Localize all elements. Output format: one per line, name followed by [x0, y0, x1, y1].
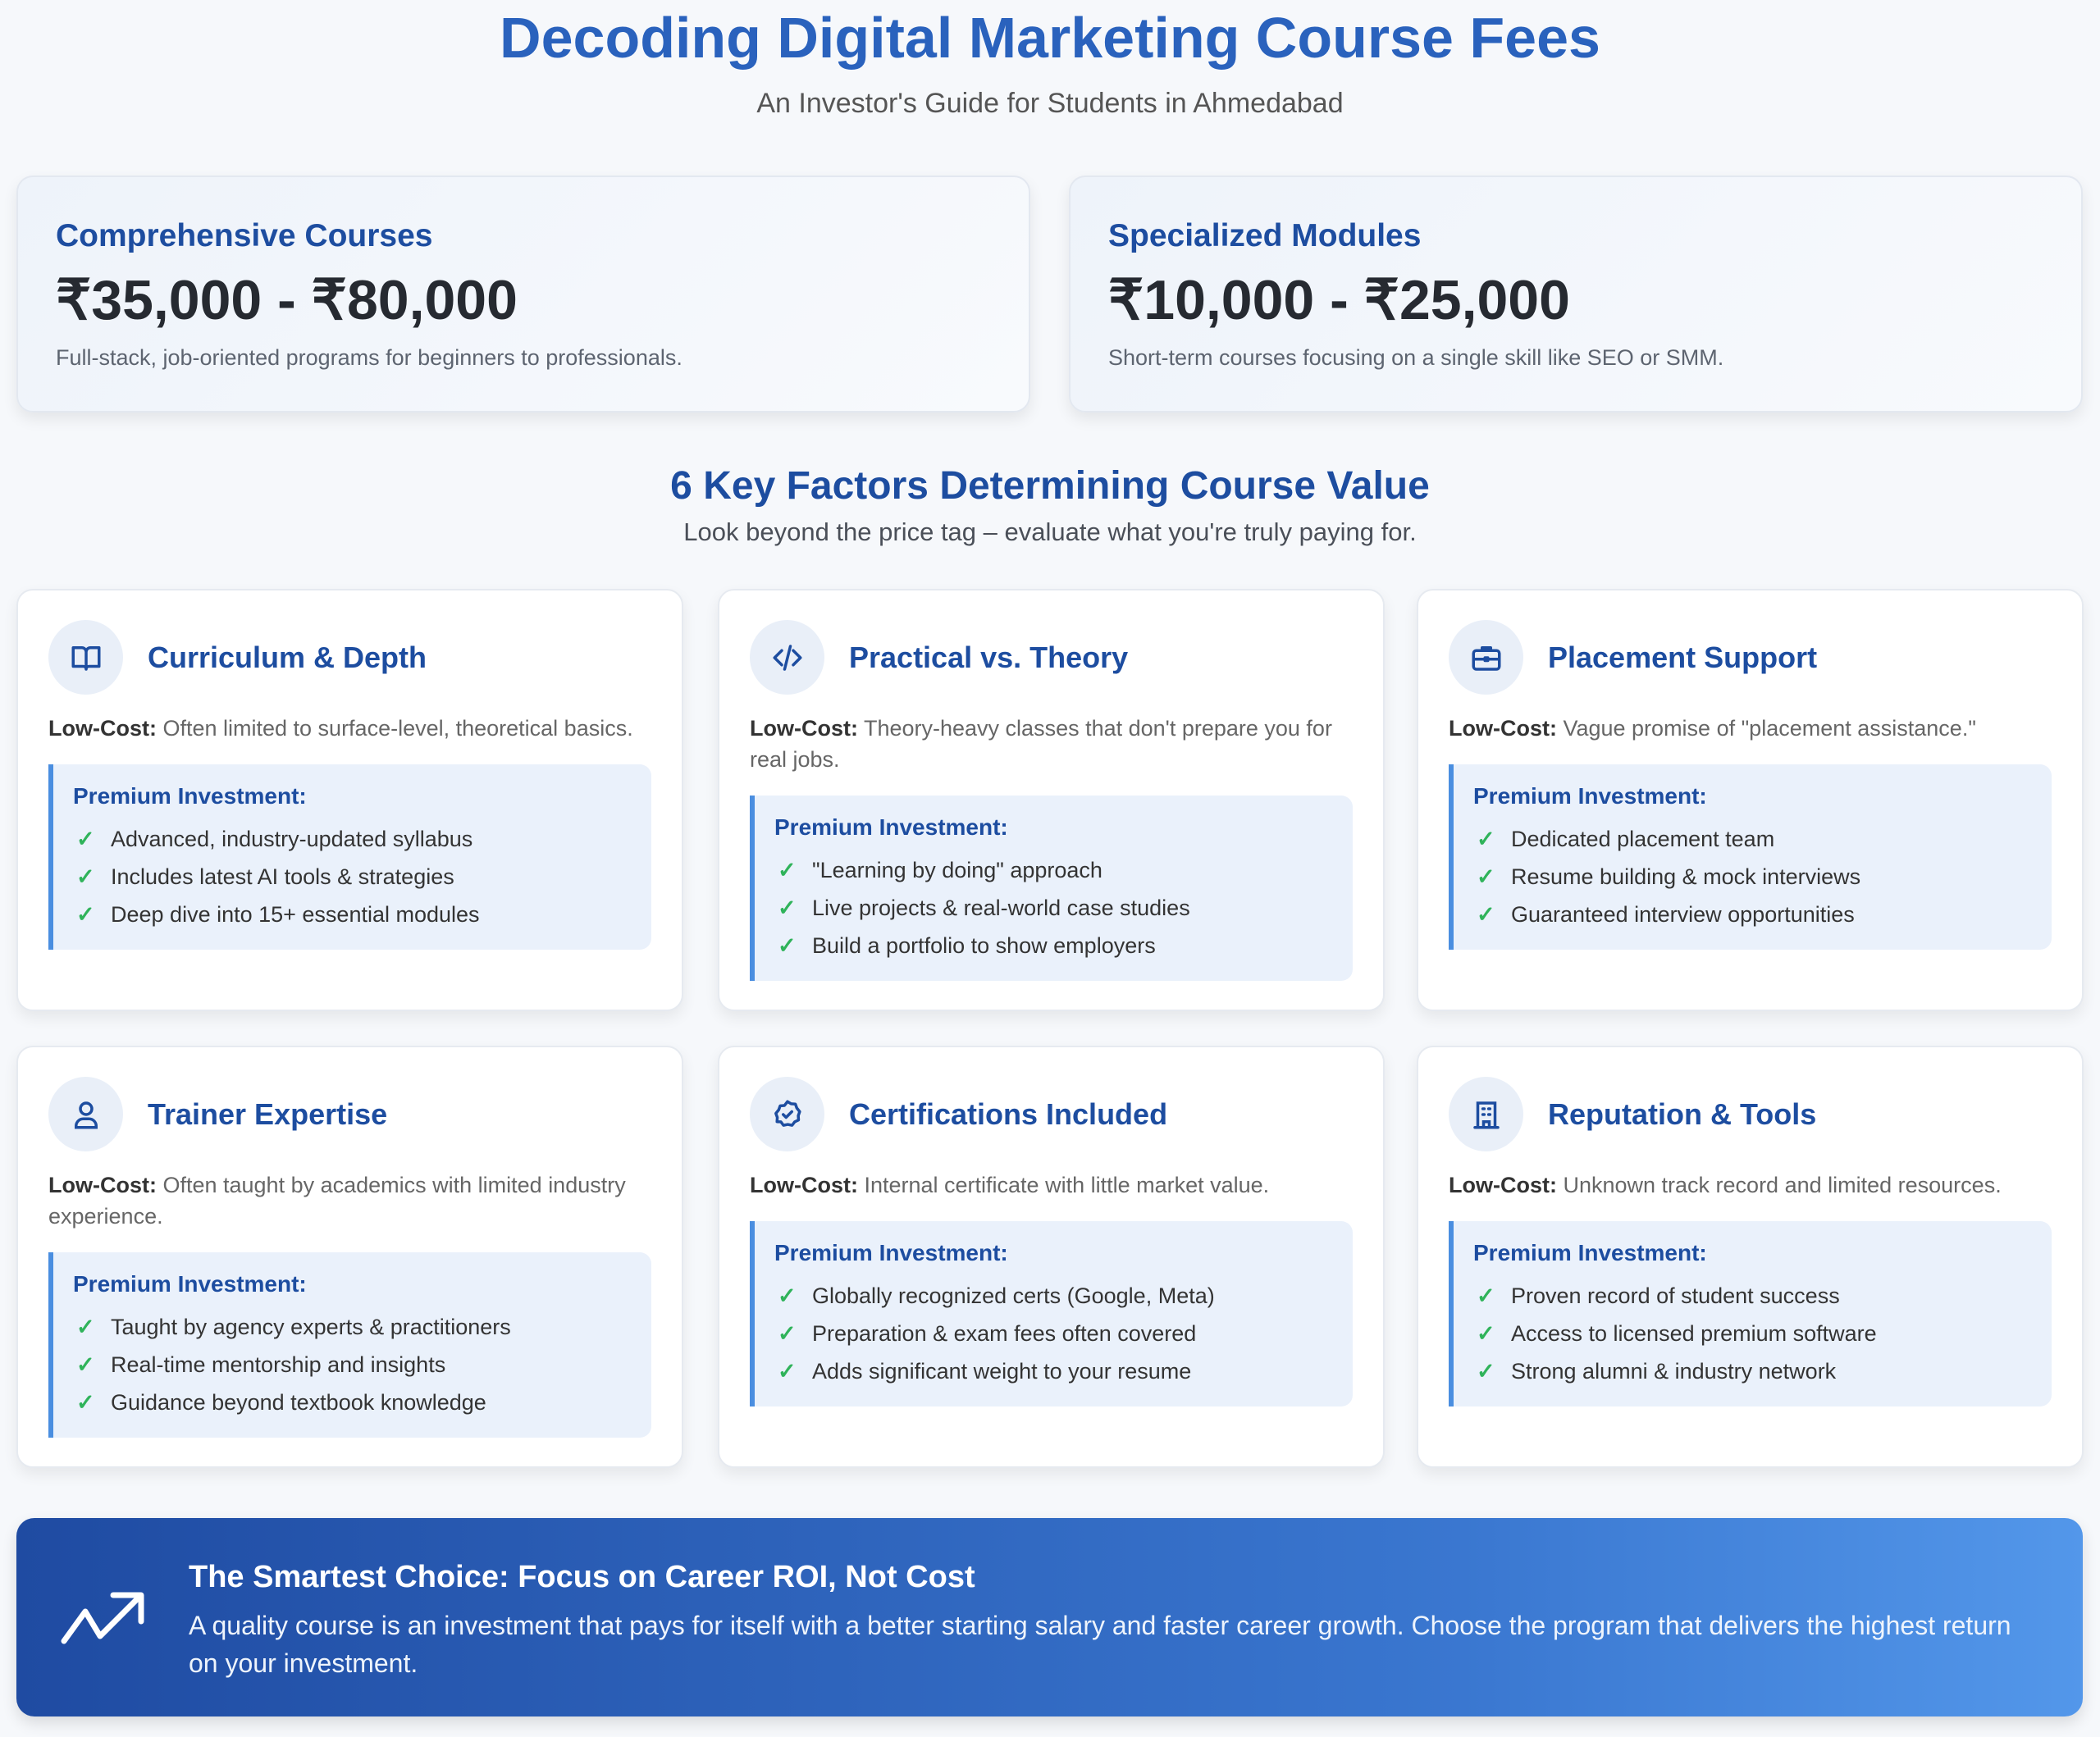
icon: badge check — [750, 1077, 824, 1151]
panel: reputation: Premium Investment: — [1473, 1240, 1707, 1265]
subtitle: An Investor's Guide for Students in Ahmedabad — [756, 88, 1344, 119]
panel: curriculum: Includes latest AI tools & strategies — [111, 864, 454, 889]
panel: comprehensive courses: ₹35,000 - ₹80,000 — [56, 269, 518, 331]
panel: practical: Live projects & real-world case studies — [812, 896, 1190, 920]
section heading: 6 Key Factors Determining Course Value — [670, 464, 1430, 508]
panel: trainer: Taught by agency experts & practitioners — [111, 1315, 511, 1339]
panel: reputation: Strong alumni & industry network — [1511, 1359, 1836, 1384]
panel: certifications: Low-Cost: Internal certificate with little market value. — [750, 1173, 1269, 1197]
panel: placement: Resume building & mock interviews — [1511, 864, 1860, 889]
panel: curriculum: Low-Cost: Often limited to surface-level, theoretical basics. — [48, 716, 633, 741]
panel: curriculum: Premium Investment: — [73, 783, 307, 809]
panel: certifications: Globally recognized certs (Google, Meta) — [812, 1283, 1215, 1308]
panel: curriculum: Advanced, industry-updated syllabus — [111, 827, 472, 851]
callout: career ROI banner: A quality course is an investment that pays for itself with a better starting salary and faster career growth. Choose the program that delivers the highest return on your investment. — [189, 1611, 2011, 1678]
icon: person — [48, 1077, 123, 1151]
panel: certifications — [718, 1046, 1385, 1468]
panel: specialized modules: Specialized Modules — [1108, 218, 1421, 253]
panel: practical: Practical vs. Theory — [849, 641, 1128, 674]
panel: specialized modules: Short-term courses focusing on a single skill like SEO or SMM. — [1108, 345, 1723, 370]
panel: certifications: Adds significant weight to your resume — [812, 1359, 1191, 1384]
panel: reputation: Reputation & Tools — [1548, 1097, 1816, 1131]
icon: book — [48, 620, 123, 695]
panel: practical — [718, 589, 1385, 1011]
panel: reputation: Proven record of student success — [1511, 1283, 1840, 1308]
panel: trainer: Guidance beyond textbook knowledge — [111, 1390, 486, 1415]
callout: career ROI banner — [16, 1518, 2083, 1716]
panel: curriculum — [16, 589, 683, 1011]
callout: career ROI banner: The Smartest Choice: Focus on Career ROI, Not Cost — [189, 1560, 975, 1594]
panel: trainer: Premium Investment: — [73, 1271, 307, 1297]
panel: placement — [1417, 589, 2084, 1011]
icon: briefcase — [1449, 620, 1523, 695]
panel: placement: Dedicated placement team — [1511, 827, 1774, 851]
panel: placement: Premium Investment: — [1473, 783, 1707, 809]
panel: comprehensive courses: Full-stack, job-oriented programs for beginners to professionals. — [56, 345, 682, 370]
panel: reputation: Access to licensed premium software — [1511, 1321, 1877, 1346]
panel: specialized modules: ₹10,000 - ₹25,000 — [1108, 269, 1570, 331]
icon: building — [1449, 1077, 1523, 1151]
panel: practical: Low-Cost: Theory-heavy classes that don't prepare you for real jobs. — [750, 716, 1332, 772]
panel: trainer — [16, 1046, 683, 1468]
panel: practical: Premium Investment: — [774, 814, 1008, 840]
title: Decoding Digital Marketing Course Fees — [500, 6, 1600, 70]
section subheading: Look beyond the price tag – evaluate what you're truly paying for. — [683, 517, 1417, 546]
panel: specialized modules — [1069, 176, 2083, 413]
icon: trending up — [61, 1593, 144, 1644]
panel: placement: Placement Support — [1548, 641, 1817, 674]
icon: code — [750, 620, 824, 695]
panel: certifications: Preparation & exam fees often covered — [812, 1321, 1196, 1346]
panel: comprehensive courses: Comprehensive Courses — [56, 218, 433, 253]
panel: certifications: Premium Investment: — [774, 1240, 1008, 1265]
panel: practical: "Learning by doing" approach — [812, 858, 1102, 882]
panel: reputation — [1417, 1046, 2084, 1468]
panel: trainer: Real-time mentorship and insights — [111, 1352, 445, 1377]
panel: certifications: Certifications Included — [849, 1097, 1167, 1131]
panel: comprehensive courses — [16, 176, 1030, 413]
panel: placement: Guaranteed interview opportunities — [1511, 902, 1855, 927]
panel: trainer: Trainer Expertise — [148, 1097, 387, 1131]
panel: curriculum: Curriculum & Depth — [148, 641, 427, 674]
panel: placement: Low-Cost: Vague promise of "placement assistance." — [1449, 716, 1976, 741]
panel: curriculum: Deep dive into 15+ essential modules — [111, 902, 480, 927]
panel: reputation: Low-Cost: Unknown track record and limited resources. — [1449, 1173, 2002, 1197]
panel: practical: Build a portfolio to show employers — [812, 933, 1156, 958]
panel: trainer: Low-Cost: Often taught by academics with limited industry experience. — [48, 1173, 626, 1229]
